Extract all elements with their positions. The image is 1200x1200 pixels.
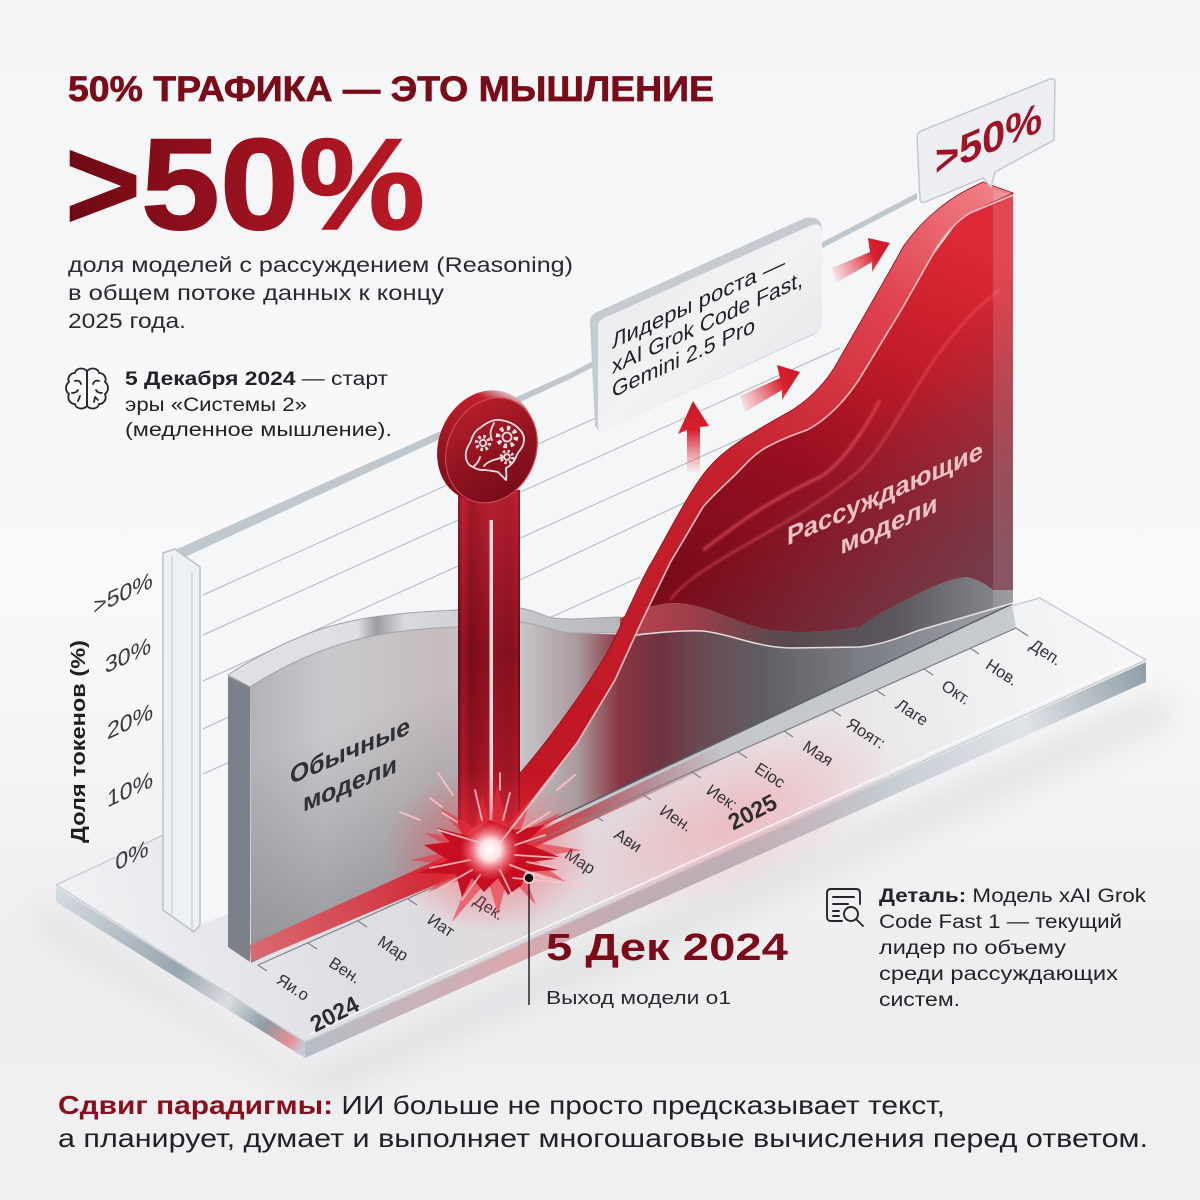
date leader line xyxy=(524,873,534,1005)
month labels: Мая xyxy=(799,738,836,770)
month labels: Иен. xyxy=(656,802,695,836)
year 2025: 2025 xyxy=(724,789,781,835)
label: regular models: модели xyxy=(303,749,397,818)
month labels: Иат xyxy=(424,911,458,941)
footer conclusion: Сдвиг парадигмы: ИИ больше не просто предсказывает текст, xyxy=(58,1090,945,1120)
y axis labels: >50% xyxy=(93,567,153,621)
y axis labels xyxy=(93,567,153,876)
stat description xyxy=(68,254,573,333)
callout: growth leaders: Лидеры роста — xyxy=(612,249,786,354)
label: regular models: Обычные xyxy=(290,711,410,790)
arrow: lower growth xyxy=(740,365,800,412)
month labels: Ави xyxy=(611,825,645,856)
month labels: Нов. xyxy=(982,656,1021,690)
detail note: систем. xyxy=(879,990,960,1011)
y axis labels: 20% xyxy=(107,698,153,745)
back glass panel xyxy=(163,193,1012,932)
label: reasoning models: Рассуждающие xyxy=(787,435,983,551)
month labels: Лаге xyxy=(892,696,931,730)
title: 50% ТРАФИКА — ЭТО МЫШЛЕНИЕ xyxy=(68,70,714,109)
disc xyxy=(420,375,556,519)
icon: document search xyxy=(827,889,863,926)
icon: brain xyxy=(66,369,108,408)
date callout: 5 Дек 2024 xyxy=(546,927,788,969)
big stat: > xyxy=(65,111,141,257)
callout: peak value: >50% xyxy=(935,93,1042,186)
callout: growth leaders: Gemini 2.5 Pro xyxy=(612,312,755,403)
month labels: Вен. xyxy=(326,954,364,988)
burst at release date xyxy=(385,768,595,932)
callout: growth leaders: xAI Grok Code Fast, xyxy=(612,266,803,379)
month labels: Мар xyxy=(374,932,411,965)
side note xyxy=(125,369,392,441)
stat description: 2025 года. xyxy=(68,310,186,333)
month labels xyxy=(273,636,1065,1005)
month labels: Окт. xyxy=(938,677,973,709)
label: reasoning models: модели xyxy=(840,488,938,560)
detail note xyxy=(879,886,1147,1011)
glass base plate xyxy=(56,598,1146,1058)
glass ribbon top xyxy=(470,182,1013,843)
side note: 5 Декабря 2024 — старт xyxy=(125,369,388,390)
y axis title: Доля токенов (%) xyxy=(68,640,90,843)
side note: эры «Системы 2» xyxy=(125,395,307,416)
icon: brain with gears xyxy=(466,420,524,480)
axis ticks xyxy=(258,648,979,971)
highlight streaks xyxy=(670,290,1000,600)
big stat: 50% xyxy=(141,111,425,257)
lower glass band xyxy=(620,577,1013,648)
glass top band xyxy=(228,608,640,687)
detail note: лидер по объему xyxy=(879,938,1067,959)
x axis xyxy=(258,628,1065,1037)
y grid lines xyxy=(203,316,840,774)
footer conclusion xyxy=(58,1090,1148,1153)
month labels: Мар xyxy=(561,845,598,878)
y axis labels: 30% xyxy=(105,632,151,679)
footer conclusion: а планирует, думает и выполняет многошаговые вычисления перед ответом. xyxy=(58,1123,1148,1153)
y axis labels: 0% xyxy=(115,835,149,876)
month labels: Eioc xyxy=(751,760,788,792)
series: regular models xyxy=(228,603,1012,962)
month labels: Деп. xyxy=(1027,636,1065,670)
base red strip xyxy=(250,845,495,962)
stat description: доля моделей с рассуждением (Reasoning) xyxy=(68,254,573,277)
side note: (медленное мышление). xyxy=(125,420,392,441)
stat description: в общем потоке данных к концу xyxy=(68,282,445,305)
date callout: Выход модели o1 xyxy=(546,987,731,1008)
detail note: среди рассуждающих xyxy=(879,964,1119,985)
burst streaks xyxy=(400,770,587,900)
date callout xyxy=(546,927,788,1008)
month labels: Яи.о xyxy=(273,971,312,1005)
callout: growth leaders xyxy=(590,218,822,431)
arrow: upper growth xyxy=(832,238,890,283)
month labels: Иек: xyxy=(703,781,740,814)
arrow: upward growth xyxy=(678,401,709,472)
pin: start marker xyxy=(420,375,556,852)
series: reasoning models xyxy=(470,182,1013,843)
month labels: Яоят: xyxy=(843,715,888,753)
detail note: Деталь: Модель xAI Grok xyxy=(879,886,1147,907)
y axis labels: 10% xyxy=(107,766,153,813)
detail note: Code Fast 1 — текущий xyxy=(879,912,1122,933)
month labels: Дек. xyxy=(470,892,507,924)
callout: peak value xyxy=(917,79,1055,203)
red reflection strip xyxy=(495,745,720,856)
year 2024: 2024 xyxy=(306,991,363,1037)
